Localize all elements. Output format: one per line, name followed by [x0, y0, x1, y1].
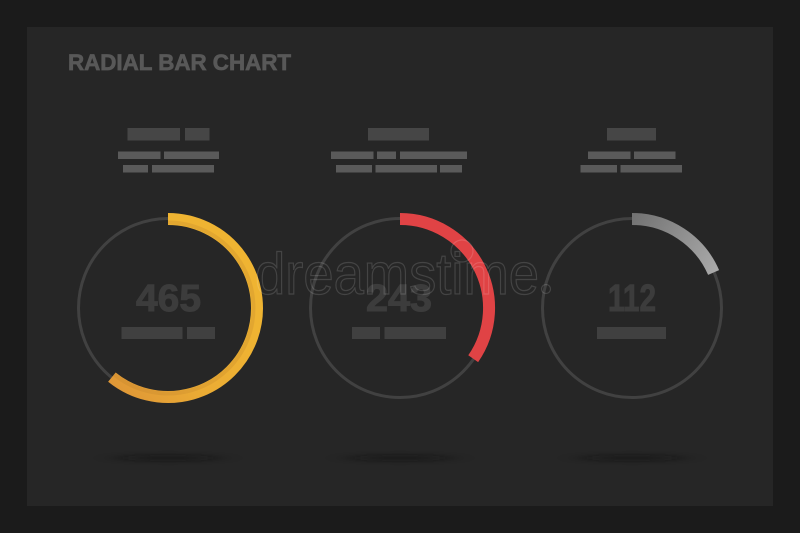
panel: left radial chart	[78, 128, 258, 461]
left shadow	[118, 455, 218, 461]
panel: middle radial chart	[310, 128, 490, 461]
middle red arc	[400, 219, 489, 359]
middle value: 243	[366, 278, 432, 320]
left ring track	[78, 218, 258, 398]
right heading placeholder	[580, 128, 682, 172]
right value label placeholder	[597, 327, 666, 339]
right value: 112	[608, 278, 656, 320]
watermark: dreamstime	[255, 242, 539, 307]
middle ring track	[310, 218, 490, 398]
left value label placeholder	[122, 327, 215, 339]
right ring track	[542, 218, 722, 398]
right shadow	[582, 455, 682, 461]
right grey arc	[632, 219, 714, 272]
left value: 465	[136, 278, 201, 320]
left heading placeholder	[118, 128, 219, 172]
left yellow arc	[112, 219, 257, 397]
panel: right radial chart	[542, 128, 722, 461]
title: RADIAL BAR CHART	[68, 50, 292, 75]
middle value label placeholder	[352, 327, 446, 339]
middle heading placeholder	[331, 128, 467, 172]
middle shadow	[350, 455, 450, 461]
